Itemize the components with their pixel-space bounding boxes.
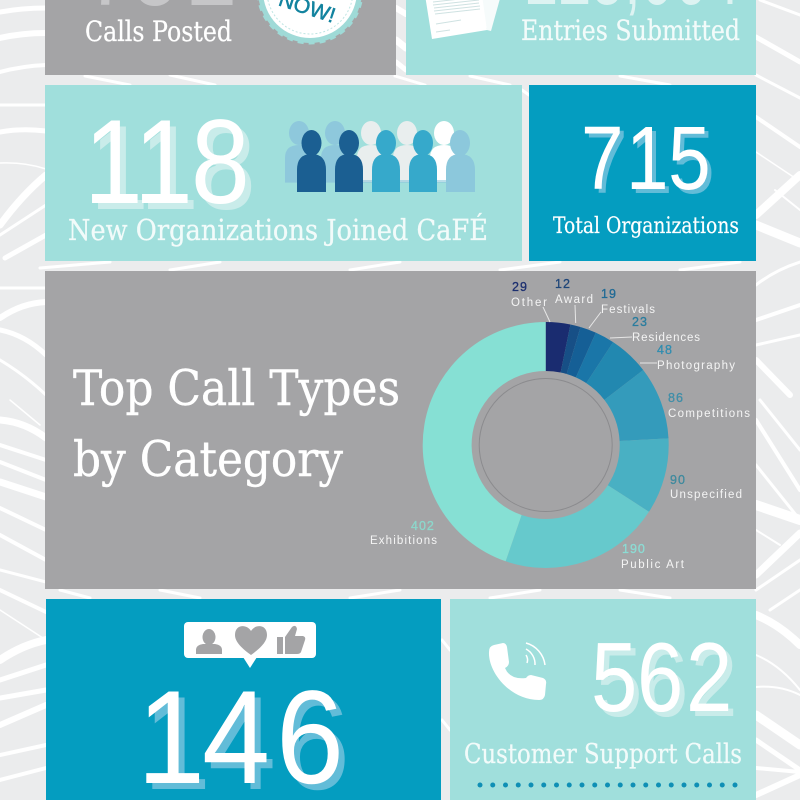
panel: social media [46,599,441,800]
icon: phone [489,643,546,700]
legend: exhibitions: Exhibitions [370,535,437,547]
legend: award: Award [555,294,593,306]
label: total organizations: Total Organizations [553,214,739,239]
legend: competitions [668,391,750,420]
heading: top call types by category: by Category [73,431,343,488]
legend: other: Other [511,297,547,309]
panel: entries submitted [406,0,756,75]
panel: new organizations [45,85,522,261]
label: entries submitted: Entries Submitted [521,14,740,47]
dotted divider [478,782,738,788]
label: customer support calls: Customer Support Calls [464,739,742,770]
number: 562: 562 [596,629,737,738]
number: 562: 562 [591,624,732,733]
icon: documents [425,0,501,39]
legend: photography: 48 [657,343,673,357]
number: 118 new organizations: 118 [84,95,250,228]
label: new organizations joined: New Organizations Joined CaFÉ [68,212,488,247]
legend: public art: Public Art [621,559,685,571]
legend: festivals [601,287,655,316]
icon: social bubble [184,622,316,668]
icon: people group [285,121,475,192]
panel: top call types [45,271,756,589]
legend: public art [621,542,685,571]
legend: festivals: 19 [601,287,617,301]
legend: photography: Photography [657,360,735,372]
number: 118 new organizations: 118 [90,101,256,234]
panel: customer support [450,599,756,800]
label: calls posted: Calls Posted [85,15,232,48]
legend: other [511,280,547,309]
heading: top call types by category [73,360,400,488]
legend: competitions: 86 [668,391,684,405]
legend: exhibitions [370,519,437,547]
legend: festivals: Festivals [601,304,655,316]
legend: award [555,277,593,306]
panel: total organizations [529,85,756,261]
legend: public art: 190 [622,542,646,556]
number: 715 total organizations: 715 [581,107,711,208]
legend: photography [657,343,735,372]
panel: calls posted [45,0,396,75]
leader lines [543,305,657,363]
chart: donut of call types [423,322,669,568]
legend: residences: Residences [632,332,700,344]
legend: competitions: Competitions [668,408,750,420]
legend: other: 29 [512,280,528,294]
legend: residences [632,315,700,344]
legend: award: 12 [555,277,571,291]
badge: now [258,0,362,43]
legend: unspecified [670,473,742,501]
heading: top call types by category: Top Call Types [73,360,400,417]
legend: exhibitions: 402 [411,519,435,533]
legend: unspecified: Unspecified [670,489,742,501]
legend: unspecified: 90 [670,473,686,487]
legend: residences: 23 [632,315,648,329]
number: 715 total organizations: 715 [585,111,715,212]
